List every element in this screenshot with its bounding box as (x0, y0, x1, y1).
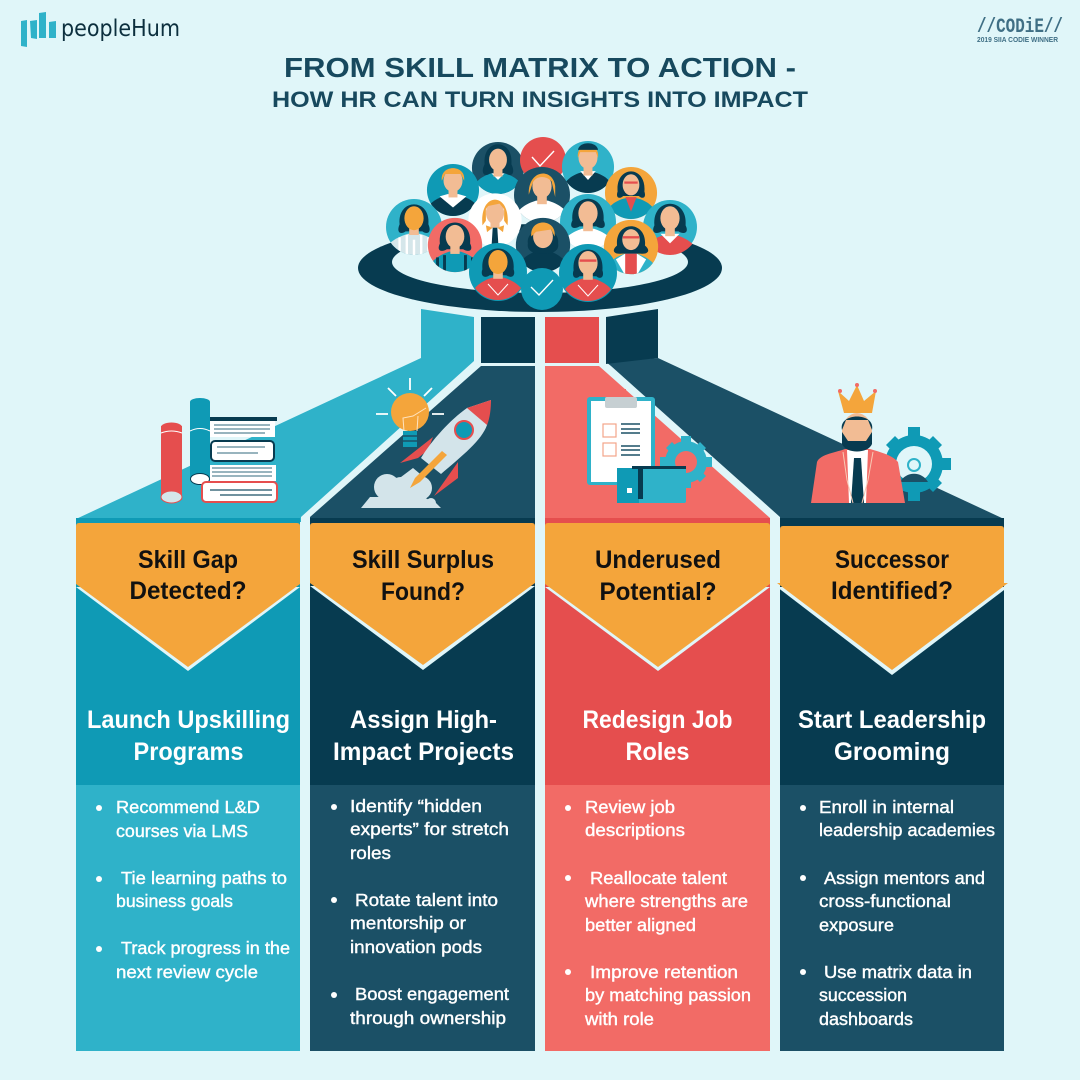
avatar: teal check (521, 268, 563, 310)
bullets: successor identified: cross-functional (819, 891, 951, 911)
icon: rocket and light bulb (361, 378, 491, 508)
avatar 4 (426, 164, 480, 216)
action: redesign job roles (582, 706, 732, 766)
action: start leadership grooming: Start Leadership (798, 706, 986, 734)
action: assign high-impact projects: Impact Projects (333, 738, 514, 766)
action: assign high-impact projects: Assign High- (350, 706, 497, 734)
action: launch upskilling (87, 706, 290, 766)
bullets: successor identified: leadership academies (819, 820, 995, 840)
bullets: skill surplus: mentorship or (350, 913, 466, 933)
bullets: successor identified: exposure (819, 915, 894, 935)
bullets: skill gap: business goals (116, 891, 233, 911)
avatar 3 (561, 141, 615, 197)
bullets: successor identified: succession (819, 985, 907, 1005)
icon: leader with crown and gear (811, 383, 951, 503)
icon: books and scrolls (161, 398, 277, 503)
bullets: successor identified: dashboards (819, 1009, 913, 1029)
bullets: skill surplus: Identify “hidden (350, 796, 482, 816)
orange header: underused potential: Underused (595, 546, 721, 574)
band: underused potential (545, 317, 770, 522)
logo: peopleHum: peopleHum (61, 16, 180, 42)
bullets: skill gap (96, 797, 290, 982)
funnel ring (358, 224, 722, 312)
action: start leadership grooming: Grooming (834, 738, 950, 766)
title: HOW HR CAN TURN INSIGHTS INTO IMPACT (272, 87, 808, 112)
bullets: skill surplus: Boost engagement (355, 984, 509, 1004)
orange header: successor identified: Identified? (831, 577, 953, 605)
avatar 14 (469, 243, 527, 304)
bullets: successor identified: Enroll in internal (819, 797, 954, 817)
avatar 1 (471, 142, 525, 198)
action: launch upskilling: Launch Upskilling (87, 706, 290, 734)
logo: peopleHum (21, 12, 180, 47)
action: redesign job roles: Roles (626, 738, 690, 766)
column: skill gap (76, 518, 300, 1051)
bullets: skill surplus: roles (350, 843, 391, 863)
bullets: skill gap: Track progress in the (121, 938, 290, 958)
avatar 10 (643, 200, 697, 255)
orange header: underused potential: Potential? (600, 578, 716, 606)
avatar 11 (427, 218, 483, 276)
bullets: skill surplus (331, 796, 509, 1028)
bullets: underused potential: Review job (585, 797, 675, 817)
orange header: skill gap: Skill Gap (138, 546, 238, 574)
avatar 13 (603, 220, 659, 278)
orange header: underused potential (545, 523, 770, 671)
funnel bands (76, 309, 1004, 526)
orange header: skill surplus (310, 523, 535, 670)
bullets: skill surplus: innovation pods (350, 937, 482, 957)
bullets: underused potential: with role (584, 1009, 654, 1029)
orange header: skill surplus: Skill Surplus (352, 546, 494, 574)
bullets: successor identified: Assign mentors and (824, 868, 985, 888)
avatar 12 (515, 218, 571, 276)
bullets: underused potential: Improve retention (590, 962, 738, 982)
orange header: skill gap: Detected? (130, 577, 246, 605)
avatar 8 (468, 193, 522, 246)
title (272, 52, 808, 112)
bullets: successor identified: Use matrix data in (824, 962, 972, 982)
avatar 6 (514, 167, 570, 221)
title: FROM SKILL MATRIX TO ACTION - (284, 52, 796, 83)
bullets: underused potential: descriptions (585, 820, 685, 840)
bullets: skill surplus: experts” for stretch (350, 819, 509, 839)
badge: CODiE winner: 2019 SIIA CODIE WINNER (977, 35, 1059, 44)
icon: clipboard, gear and folder (587, 389, 712, 503)
bullets: underused potential: where strengths are (584, 891, 748, 911)
bullets: skill gap: Recommend L&D (116, 797, 260, 817)
bullets: skill surplus: Rotate talent into (355, 890, 498, 910)
avatar 5 (604, 167, 658, 223)
avatar 15 (559, 244, 617, 305)
bullets: skill surplus: through ownership (350, 1008, 506, 1028)
bullets: underused potential: Reallocate talent (590, 868, 727, 888)
avatar 7 (386, 199, 442, 255)
orange header: skill gap (76, 523, 300, 671)
action: assign high-impact projects (333, 706, 514, 766)
band: skill surplus (310, 317, 535, 522)
bullets: underused potential (565, 797, 751, 1029)
band: successor (606, 309, 1004, 526)
bullets: successor identified (800, 797, 995, 1029)
avatar: red check (520, 137, 566, 183)
orange header: successor identified: Successor (835, 546, 949, 574)
bullets: skill gap: courses via LMS (116, 821, 248, 841)
orange header: successor identified (777, 526, 1008, 675)
column: underused potential (545, 518, 770, 1051)
bullets: skill gap: Tie learning paths to (121, 868, 287, 888)
avatar 9 (560, 194, 616, 247)
orange header: skill surplus: Found? (381, 578, 465, 606)
bullets: underused potential: better aligned (585, 915, 696, 935)
people group (383, 137, 699, 310)
action: start leadership grooming (798, 706, 986, 766)
bullets: skill gap: next review cycle (116, 962, 258, 982)
band: skill gap (76, 309, 474, 522)
column: successor identified (777, 518, 1008, 1051)
action: launch upskilling: Programs (134, 738, 244, 766)
action: redesign job roles: Redesign Job (582, 706, 732, 734)
bullets: underused potential: by matching passion (585, 985, 751, 1005)
column: skill surplus (310, 518, 535, 1051)
